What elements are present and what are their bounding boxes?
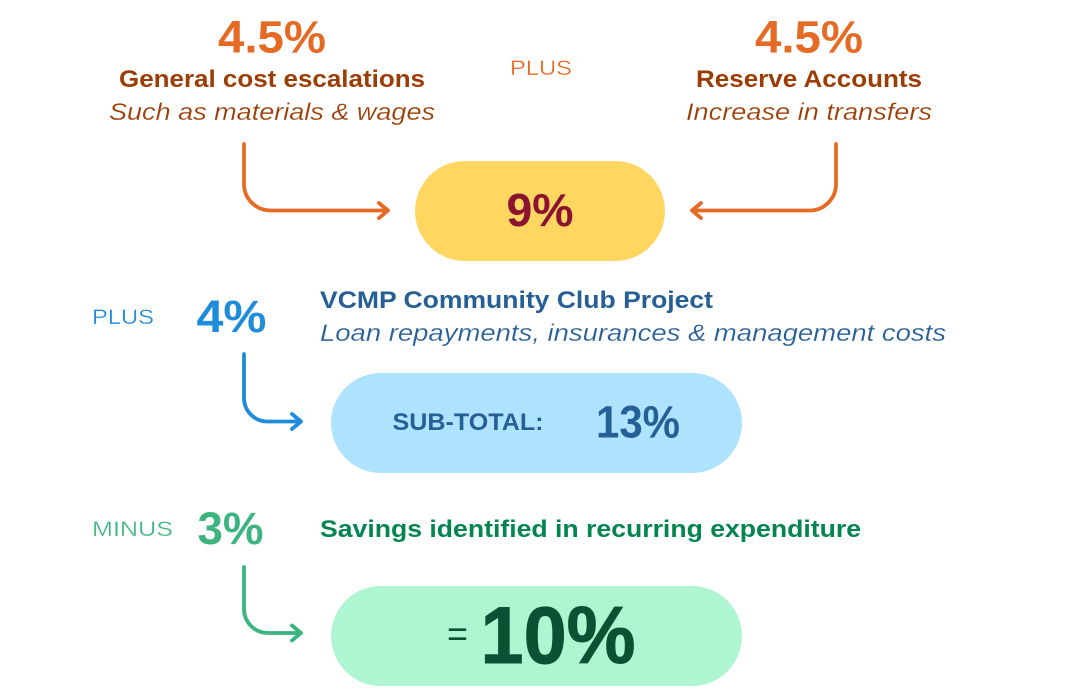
4% figure: 4% bbox=[196, 291, 266, 342]
pill: total 10%: = bbox=[447, 613, 468, 654]
VCMP project text bbox=[320, 287, 946, 347]
left item: general cost escalations bbox=[109, 12, 435, 126]
left heading: General cost escalations bbox=[119, 66, 425, 93]
left subtitle: Such as materials & wages bbox=[109, 99, 435, 126]
savings text: Savings identified in recurring expenditure bbox=[320, 516, 861, 543]
arrow: 4% to sub-total bbox=[244, 354, 301, 429]
minus label: MINUS bbox=[92, 518, 173, 541]
pill: 9%: 9% bbox=[506, 184, 574, 236]
pill: total 10%: 10% bbox=[480, 591, 636, 681]
pill: 9% bbox=[415, 161, 665, 261]
right heading: Reserve Accounts bbox=[696, 66, 922, 93]
arrow: 3% to total bbox=[244, 567, 301, 640]
right item: reserve accounts bbox=[686, 12, 932, 126]
right percentage: 4.5% bbox=[755, 12, 863, 62]
3% figure: 3% bbox=[198, 503, 264, 554]
arrow: left to 9% bbox=[244, 144, 388, 218]
left percentage: 4.5% bbox=[218, 12, 326, 62]
right subtitle: Increase in transfers bbox=[686, 99, 932, 126]
pill: sub-total bbox=[331, 373, 742, 473]
plus label middle: PLUS bbox=[92, 306, 154, 329]
pill: total 10% bbox=[331, 586, 742, 686]
pill: sub-total: SUB-TOTAL: bbox=[392, 409, 544, 436]
plus label top: PLUS bbox=[510, 57, 572, 80]
VCMP heading: VCMP Community Club Project bbox=[320, 287, 713, 314]
pill: sub-total: 13% bbox=[596, 396, 680, 448]
arrow: right to 9% bbox=[692, 144, 836, 218]
VCMP subtitle: Loan repayments, insurances & management costs bbox=[320, 320, 946, 347]
